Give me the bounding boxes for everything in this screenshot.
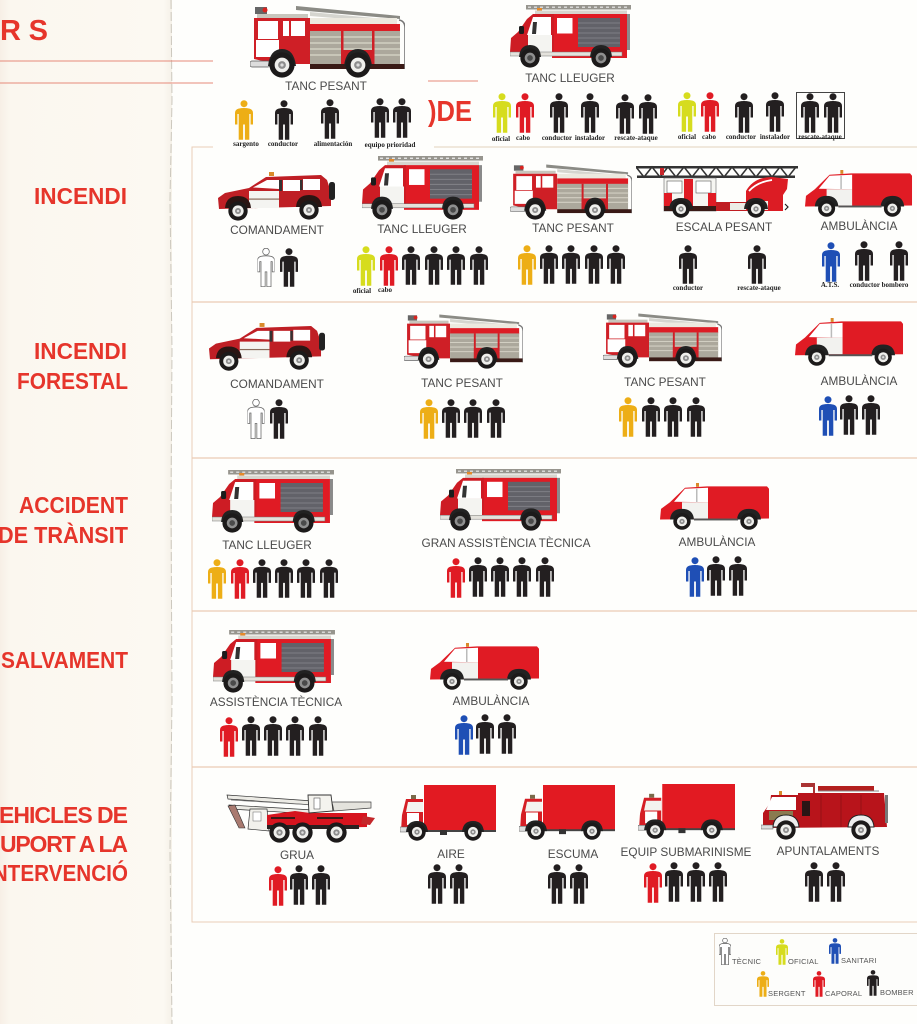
caption: tanc lleuger: TANC LLEUGER: [525, 71, 615, 85]
vehicle: tanc lleuger: [212, 470, 334, 533]
heading: incendi forestal: [17, 338, 128, 394]
crew: tanc lleuger second option: [678, 92, 844, 141]
crew: comandament: [248, 399, 288, 439]
caption: apuntalaments: APUNTALAMENTS: [777, 844, 879, 858]
heading: incendi forestal: INCENDI: [34, 338, 127, 364]
crew: tanc lleuger: cabo: [378, 286, 392, 294]
legend: [714, 934, 917, 1006]
crew: tanc lleuger first option: rescate-ataque: [614, 134, 658, 142]
vehicle: tanc pesant: [510, 165, 632, 220]
crew: tanc lleuger second option: oficial: [678, 133, 696, 141]
vehicle: escuma: [519, 785, 615, 840]
vehicle: gran assistencia tecnica: [440, 469, 561, 531]
crew: tanc pesant: [420, 399, 505, 439]
crew: comandament: [258, 248, 298, 287]
caption: ambulancia: AMBULÀNCIA: [453, 694, 529, 708]
caption: ambulancia: AMBULÀNCIA: [821, 374, 897, 388]
caption: tanc pesant: TANC PESANT: [624, 375, 706, 389]
legend: SANITARI: [841, 956, 877, 965]
caption: escuma: ESCUMA: [548, 847, 598, 861]
vehicle: comandament: [209, 323, 325, 371]
crew: tanc pesant: [619, 397, 705, 437]
crew: tanc lleuger first option: [492, 93, 658, 143]
caption: tanc lleuger: TANC LLEUGER: [377, 222, 467, 236]
crew: tanc lleuger: oficial: [353, 287, 371, 295]
heading: accident de transit: [0, 492, 128, 548]
header strip: crew configurations: [233, 5, 844, 149]
crew: ambulancia: [455, 714, 516, 755]
caption: aire: AIRE: [437, 847, 465, 861]
crew: ambulancia: conductor bombero: [850, 281, 909, 289]
heading: incendi: INCENDI: [34, 183, 127, 209]
crew: aire: [428, 864, 468, 904]
vehicle: tanc lleuger: [362, 156, 483, 220]
crew: tanc lleuger first option: oficial: [492, 135, 510, 143]
crew: grua: [269, 865, 330, 906]
legend: SERGENT: [768, 989, 806, 998]
caption: assistencia tecnica: ASSISTÈNCIA TÈCNICA: [210, 695, 342, 709]
heading: accident de transit: DE TRÀNSIT: [0, 521, 128, 548]
caption: comandament: COMANDAMENT: [230, 223, 324, 237]
heading: vehicles de suport a la intervencio: EHICLES DE: [0, 802, 128, 828]
vehicle: ambulancia: [430, 643, 539, 690]
legend: CAPORAL: [825, 989, 862, 998]
panel: vehicles de suport a la intervencio: [0, 783, 888, 906]
crew: tanc pesant: conductor: [268, 140, 298, 148]
crew: tanc pesant: [518, 245, 625, 285]
caption: tanc pesant: TANC PESANT: [421, 376, 503, 390]
vehicle: apuntalaments: [761, 783, 888, 840]
heading: salvament: SALVAMENT: [1, 647, 128, 673]
crew: gran assistencia tecnica: [447, 557, 554, 598]
legend: OFICIAL: [788, 957, 819, 966]
panel: salvament: [1, 630, 539, 757]
crew: tanc lleuger second option: cabo: [702, 133, 716, 141]
crew: equip submarinisme: [644, 862, 727, 903]
vehicle: equip submarinisme: [638, 784, 735, 839]
crew: tanc lleuger: [208, 559, 338, 599]
caption: comandament: COMANDAMENT: [230, 377, 324, 391]
crew: tanc lleuger second option: rescate-ataque: [798, 133, 842, 141]
crew: tanc lleuger first option: instalador: [575, 134, 605, 142]
crew: escala pesant: rescate-ataque: [737, 284, 781, 292]
crew: tanc lleuger: [353, 246, 488, 295]
caption: tanc pesant: TANC PESANT: [532, 221, 614, 235]
heading: incendi forestal: FORESTAL: [17, 368, 128, 394]
crew: tanc lleuger first option: conductor: [542, 134, 572, 142]
heading: vehicles de suport a la intervencio: [0, 802, 128, 886]
panel: incendi forestal: [17, 314, 903, 439]
crew: tanc lleuger second option: conductor: [726, 133, 756, 141]
legend: TÈCNIC: [732, 957, 762, 966]
vehicle: ambulancia: [805, 170, 912, 217]
crew: tanc pesant: sargento: [233, 140, 259, 148]
caption: gran assistencia tecnica: GRAN ASSISTÈNCIA TÈCNICA: [422, 536, 591, 550]
caption: ambulancia: AMBULÀNCIA: [679, 535, 755, 549]
caption: escala pesant: ESCALA PESANT: [676, 220, 772, 234]
cropped title letters: R S: [0, 15, 48, 47]
vehicle: assistencia tecnica: [213, 630, 335, 693]
caption: equip submarinisme: EQUIP SUBMARINISME: [621, 845, 752, 859]
crew: escala pesant: [673, 245, 781, 292]
crew: tanc lleuger second option: instalador: [760, 133, 790, 141]
crew: ambulancia: [819, 395, 880, 436]
crew: escuma: [548, 864, 588, 904]
cropped title letters behind the header pasted strip: )DE: [428, 96, 472, 128]
crew: tanc lleuger first option: cabo: [516, 134, 530, 142]
crew: ambulancia: [821, 241, 909, 289]
vehicle: comandament: [218, 172, 335, 221]
legend: BOMBER: [880, 988, 914, 997]
crew: tanc pesant: [233, 98, 415, 149]
vehicle: tanc pesant: [250, 6, 405, 78]
panel: incendi: [34, 156, 912, 295]
vehicle: tanc lleuger: [510, 5, 631, 68]
vehicle: tanc pesant: [603, 314, 722, 368]
crew: assistencia tecnica: [220, 716, 327, 757]
crew: ambulancia: [686, 556, 747, 597]
vehicle: aire: [400, 785, 496, 841]
crew: apuntalaments: [805, 862, 845, 902]
caption: grua: GRUA: [280, 848, 314, 862]
vehicle: ambulancia: [660, 483, 769, 530]
vehicle: tanc pesant: [404, 315, 523, 369]
panel: accident de transit: [0, 469, 769, 599]
caption: tanc pesant: TANC PESANT: [285, 79, 367, 93]
vehicle: ambulancia: [795, 318, 903, 366]
crew: tanc pesant: alimentación: [314, 140, 352, 148]
crew: tanc pesant: equipo prioridad: [365, 141, 415, 149]
vehicle: grua: [227, 795, 375, 843]
crew: ambulancia: A.T.S.: [821, 281, 839, 289]
heading: vehicles de suport a la intervencio: UPORT A LA: [0, 831, 128, 857]
caption: ambulancia: AMBULÀNCIA: [821, 219, 897, 233]
caption: tanc lleuger: TANC LLEUGER: [222, 538, 312, 552]
heading: accident de transit: ACCIDENT: [19, 492, 128, 518]
vehicle: escala pesant: [636, 166, 798, 218]
crew: escala pesant: conductor: [673, 284, 703, 292]
